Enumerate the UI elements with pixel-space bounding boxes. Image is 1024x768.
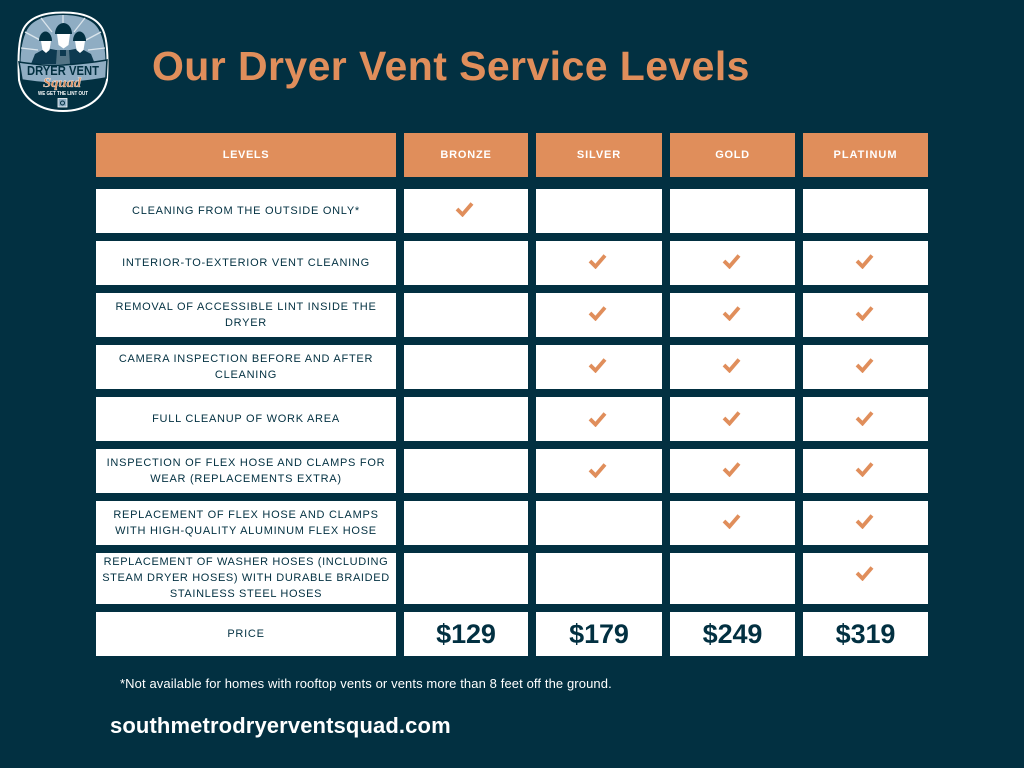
icon: dryer vent squad logo: DRYER VENT: [27, 64, 99, 78]
row: flex hose inspection: WEAR (REPLACEMENTS EXTRA): [150, 473, 342, 485]
workers: [39, 32, 52, 41]
footnote: *Not available for homes with rooftop vents or vents more than 8 feet off the ground.: [120, 676, 612, 691]
row: flex hose replacement: REPLACEMENT OF FLEX HOSE AND CLAMPS: [113, 509, 379, 521]
row: price: $129: [436, 619, 496, 649]
row: full cleanup: [96, 397, 928, 441]
row: camera inspection: [96, 345, 928, 389]
row: washer hoses: STEAM DRYER HOSES) WITH DURABLE BRAIDED: [102, 572, 390, 584]
row: price: PRICE: [227, 628, 265, 640]
header row: PLATINUM: [833, 149, 898, 161]
row: flex hose inspection: [96, 449, 928, 493]
row: camera inspection: CAMERA INSPECTION BEFORE AND AFTER: [119, 353, 373, 365]
title: Our Dryer Vent Service Levels: [152, 43, 750, 89]
row: cleaning from outside: [96, 189, 928, 233]
row: cleaning from outside: CLEANING FROM THE OUTSIDE ONLY*: [132, 205, 360, 217]
row: lint removal: REMOVAL OF ACCESSIBLE LINT INSIDE THE: [115, 301, 377, 313]
row: price: [96, 612, 928, 656]
row: washer hoses: STAINLESS STEEL HOSES: [170, 588, 322, 600]
row: price: $249: [703, 619, 762, 649]
row: washer hoses: [96, 553, 928, 604]
website url: southmetrodryerventsquad.com: [110, 713, 451, 738]
header row: GOLD: [715, 149, 750, 161]
row: washer hoses: REPLACEMENT OF WASHER HOSES (INCLUDING: [104, 556, 388, 568]
row: full cleanup: FULL CLEANUP OF WORK AREA: [152, 413, 340, 425]
row: lint removal: [96, 293, 928, 337]
row: flex hose replacement: WITH HIGH-QUALITY ALUMINUM FLEX HOSE: [115, 525, 377, 537]
row: flex hose replacement: [96, 501, 928, 545]
row: flex hose inspection: INSPECTION OF FLEX HOSE AND CLAMPS FOR: [107, 457, 385, 469]
row: interior to exterior: INTERIOR-TO-EXTERIOR VENT CLEANING: [122, 257, 370, 269]
icon: dryer vent squad logo: [18, 12, 108, 112]
header row: LEVELS: [223, 149, 269, 161]
header row: SILVER: [577, 149, 621, 161]
header row: [96, 133, 928, 177]
banner: [19, 60, 107, 83]
icon: dryer vent squad logo: Squad: [43, 76, 82, 91]
row: camera inspection: CLEANING: [215, 369, 277, 381]
row: price: $319: [836, 619, 895, 649]
row: lint removal: DRYER: [225, 317, 267, 329]
icon: dryer vent squad logo: WE GET THE LINT OUT: [38, 91, 88, 97]
row: price: $179: [569, 619, 629, 649]
row: interior to exterior: [96, 241, 928, 285]
shoulders: [31, 48, 95, 64]
header row: BRONZE: [440, 149, 492, 161]
